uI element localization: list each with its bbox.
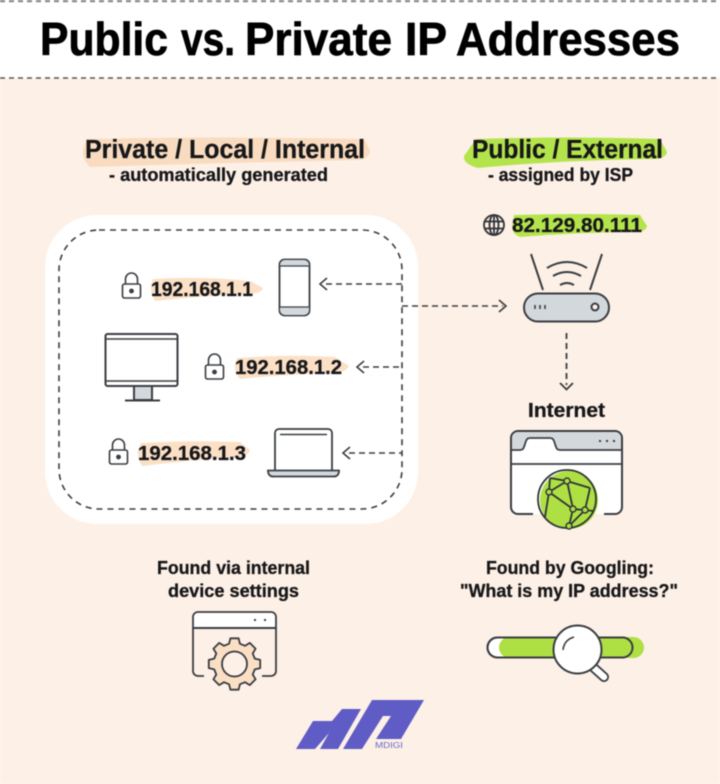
text: found by googling: Found by Googling: [486, 558, 654, 578]
title: Private [245, 13, 392, 65]
title [40, 13, 680, 65]
icon: monitor [106, 334, 178, 400]
arrow: to laptop [343, 447, 402, 459]
title: Public [40, 13, 168, 65]
subheading: private: - automatically generated [109, 165, 328, 185]
gear [209, 638, 260, 690]
panel: private network [45, 215, 418, 524]
icon: router [524, 254, 609, 322]
title: IP [405, 13, 447, 65]
arrow: router to internet [560, 333, 573, 390]
device row: desktop [106, 334, 349, 400]
title: vs. [181, 13, 235, 65]
icon: lock [206, 354, 224, 379]
icon: lock [110, 439, 128, 464]
heading: public: Public / External [472, 136, 663, 164]
text: found via internal: Found via internal [157, 558, 310, 578]
public IP address: 82.129.80.111 [512, 214, 642, 237]
icon: phone [280, 260, 310, 316]
text: found by googling [460, 558, 678, 601]
icon: laptop [268, 429, 339, 476]
text: found via internal: device settings [168, 581, 299, 601]
icon: globe [484, 215, 504, 235]
heading: private: Private / Local / Internal [85, 136, 365, 164]
title: Addresses [456, 13, 680, 65]
text: found via internal [157, 558, 310, 601]
icon: lock [122, 273, 140, 298]
label: internet: Internet [528, 400, 605, 422]
device row: laptop: 192.168.1.3 [138, 442, 246, 465]
device row: desktop: 192.168.1.2 [235, 356, 342, 379]
logo: MDIGI: MDIGI [375, 741, 403, 750]
globe [540, 471, 598, 529]
device row: phone: 192.168.1.1 [151, 278, 253, 301]
arrow: to desktop [357, 361, 402, 373]
logo: MDIGI [296, 700, 424, 750]
text: found by googling: "What is my IP address?" [460, 581, 678, 601]
device row: laptop [110, 429, 339, 476]
icon: settings window [193, 612, 276, 690]
arrow: to phone [320, 278, 402, 290]
device row: phone [122, 260, 310, 316]
icon: search bar [488, 626, 644, 677]
subheading: public: - assigned by ISP [488, 165, 633, 185]
arrow: network to router [402, 300, 506, 312]
icon: internet browser [511, 431, 622, 529]
